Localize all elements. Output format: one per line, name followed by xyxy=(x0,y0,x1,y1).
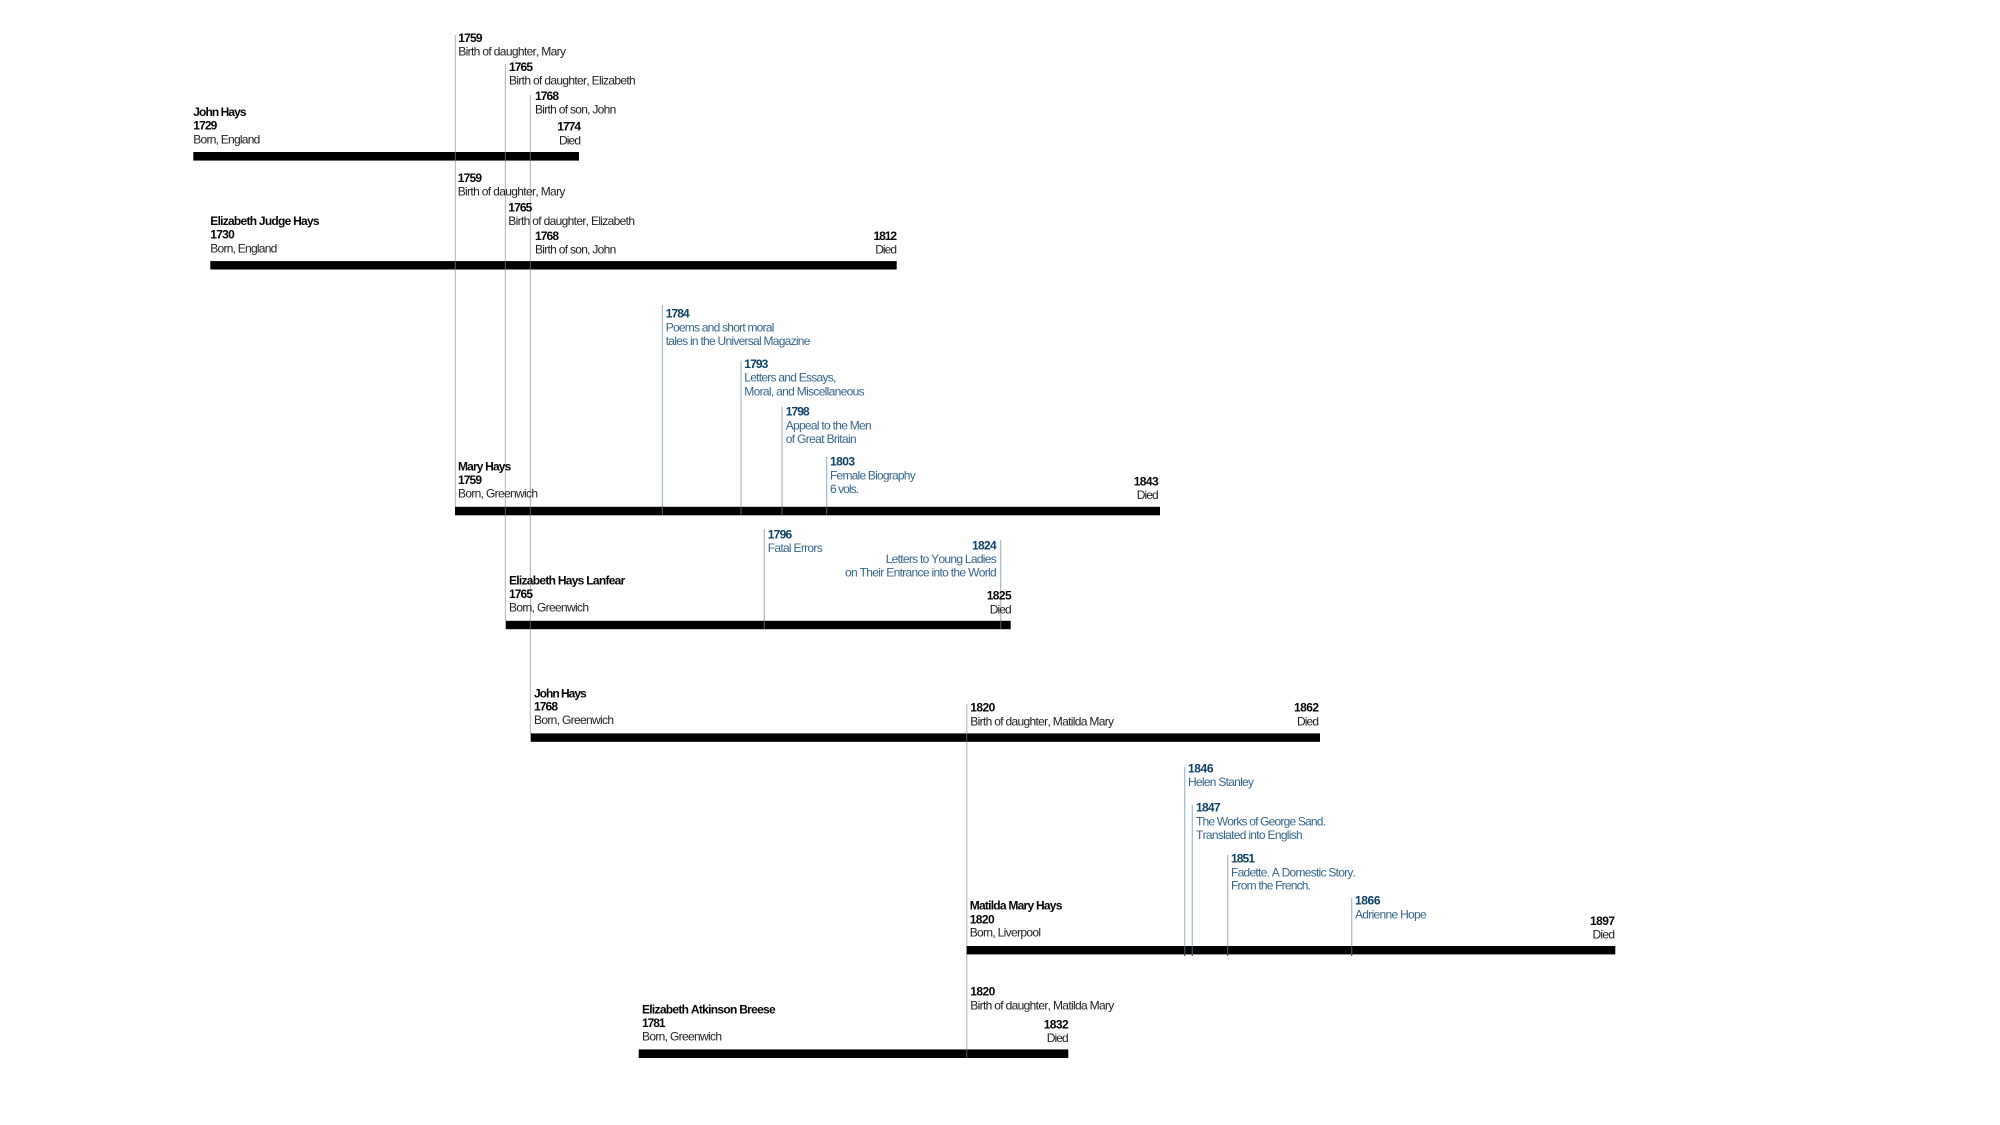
publication: 1796 Fatal Errors: 1796 xyxy=(768,527,793,541)
publication: 1851 Fadette xyxy=(1227,852,1356,947)
label: John Hays died 1774: 1774 xyxy=(557,120,581,134)
event: 1765 birth of daughter Elizabeth xyxy=(508,200,635,228)
publication: 1851 Fadette: Fadette. A Domestic Story. xyxy=(1231,865,1356,879)
label: Elizabeth Hays Lanfear died 1825 xyxy=(987,589,1012,616)
event: 1765 birth of daughter Elizabeth xyxy=(509,60,636,87)
publication: 1798 Appeal to the Men of Great Britain: 1798 xyxy=(786,405,810,419)
label: Elizabeth Judge Hays died 1812: Died xyxy=(875,243,897,257)
publication: 1846 Helen Stanley: 1846 xyxy=(1188,761,1214,775)
label: Elizabeth Hays Lanfear born xyxy=(509,573,626,615)
life bar: John Hays 1768 xyxy=(531,733,1320,742)
label: Elizabeth Atkinson Breese died 1832: Died xyxy=(1047,1031,1069,1045)
publication: 1847 The Works of George Sand: The Works of George Sand. xyxy=(1196,814,1326,828)
publication: 1851 Fadette: 1851 xyxy=(1231,852,1255,866)
label: John Hays born 1768: Born, Greenwich xyxy=(534,713,614,727)
event: 1765 birth of daughter Elizabeth: 1765 xyxy=(509,60,533,74)
label: Matilda Mary Hays born: Born, Liverpool xyxy=(970,926,1041,940)
publication: 1798 Appeal to the Men of Great Britain: Appeal to the Men xyxy=(786,418,872,432)
label: Matilda Mary Hays born: Matilda Mary Hays xyxy=(970,899,1063,913)
event: 1768 birth of son John: Birth of son, John xyxy=(535,103,616,117)
timeline: Elizabeth Atkinson Breese 1781-1832 xyxy=(639,985,1114,1058)
label: Elizabeth Atkinson Breese born: Elizabeth Atkinson Breese xyxy=(642,1002,776,1016)
timeline: John Hays 1729-1774 xyxy=(193,31,636,161)
label: Elizabeth Judge Hays died 1812 xyxy=(874,229,897,257)
label: Elizabeth Judge Hays born: Born, England xyxy=(210,241,277,255)
label: John Hays died 1774: Died xyxy=(559,133,581,147)
connector line: 1820 birth of Matilda Mary xyxy=(966,704,967,1058)
event: 1765 birth of daughter Elizabeth: 1765 xyxy=(508,200,533,214)
publication: 1846 Helen Stanley: Helen Stanley xyxy=(1188,775,1254,789)
publication: 1784 Poems and short moral tales xyxy=(662,305,811,507)
label: Matilda Mary Hays born xyxy=(970,899,1063,940)
event: 1820 birth of daughter Matilda Mary: 1820 xyxy=(970,985,996,999)
publication: 1824 Letters to Young Ladies: Letters to Young Ladies xyxy=(886,552,997,566)
label: Mary Hays died 1843: 1843 xyxy=(1134,474,1159,488)
life bar: Elizabeth Judge Hays xyxy=(210,261,897,270)
event: 1759 birth of daughter Mary: Birth of daughter, Mary xyxy=(458,45,566,59)
publication: 1824 Letters to Young Ladies: on Their Entrance into the World xyxy=(845,566,997,580)
label: Elizabeth Judge Hays born xyxy=(210,214,320,255)
publication: 1847 The Works of George Sand xyxy=(1192,801,1326,947)
label: John Hays born 1768 xyxy=(534,686,614,727)
publication: 1847 The Works of George Sand: Translated into English xyxy=(1196,828,1303,842)
publication: 1793 Letters and Essays: Moral, and Miscellaneous xyxy=(744,384,865,398)
label: Matilda Mary Hays died 1897: 1897 xyxy=(1590,914,1615,928)
publication: 1803 Female Biography: 6 vols. xyxy=(830,482,859,496)
event: 1759 birth of daughter Mary: Birth of daughter, Mary xyxy=(458,185,565,199)
event: 1759 birth of daughter Mary xyxy=(458,31,566,59)
event: 1820 birth of daughter Matilda Mary: 1820 xyxy=(970,701,996,715)
timeline: Mary Hays 1759-1843 xyxy=(455,305,1160,515)
publication: 1798 Appeal to the Men of Great Britain xyxy=(781,405,872,507)
label: Elizabeth Hays Lanfear born: Born, Greenwich xyxy=(509,601,589,615)
label: Elizabeth Atkinson Breese died 1832 xyxy=(1044,1017,1069,1045)
event: 1768 birth of son John: Birth of son, John xyxy=(535,243,616,257)
publication: 1824 Letters to Young Ladies: 1824 xyxy=(972,538,997,552)
label: John Hays born: 1729 xyxy=(193,119,218,133)
label: John Hays died 1862: 1862 xyxy=(1294,701,1319,715)
label: John Hays born 1768: 1768 xyxy=(534,699,558,713)
label: Elizabeth Judge Hays died 1812: 1812 xyxy=(874,229,897,243)
event: 1768 birth of son John: 1768 xyxy=(535,89,559,103)
label: Elizabeth Judge Hays born: 1730 xyxy=(210,228,235,242)
publication: 1803 Female Biography: 1803 xyxy=(830,455,855,469)
label: John Hays born xyxy=(193,105,260,146)
label: Matilda Mary Hays born: 1820 xyxy=(970,912,995,926)
label: John Hays born 1768: John Hays xyxy=(534,686,587,700)
publication: 1793 Letters and Essays xyxy=(740,357,865,507)
event: 1765 birth of daughter Elizabeth: Birth of daughter, Elizabeth xyxy=(508,214,635,228)
publication: 1796 Fatal Errors xyxy=(764,527,823,621)
publication: 1847 The Works of George Sand: 1847 xyxy=(1196,801,1221,815)
label: John Hays died 1774 xyxy=(557,120,581,147)
connector line: 1768 birth of John xyxy=(530,95,531,734)
timeline: Elizabeth Hays Lanfear 1765-1825 xyxy=(506,527,1012,629)
life bar: Elizabeth Hays Lanfear xyxy=(506,621,1011,629)
label: Elizabeth Atkinson Breese born xyxy=(642,1002,776,1043)
label: Elizabeth Atkinson Breese born: Born, Greenwich xyxy=(642,1029,722,1043)
timeline: John Hays 1768-1862 xyxy=(531,686,1320,742)
event: 1820 birth of daughter Matilda Mary xyxy=(970,985,1114,1012)
publication: 1793 Letters and Essays: 1793 xyxy=(744,357,769,371)
label: Matilda Mary Hays died 1897 xyxy=(1590,914,1615,942)
publication: 1803 Female Biography: Female Biography xyxy=(830,468,916,482)
label: Elizabeth Hays Lanfear died 1825: Died xyxy=(990,602,1012,616)
event: 1768 birth of son John: 1768 xyxy=(535,229,559,243)
label: Elizabeth Judge Hays born: Elizabeth Judge Hays xyxy=(210,214,320,228)
event: 1759 birth of daughter Mary: 1759 xyxy=(458,31,483,45)
label: Mary Hays born: 1759 xyxy=(458,473,482,487)
label: Mary Hays died 1843: Died xyxy=(1137,488,1159,502)
label: John Hays died 1862: Died xyxy=(1297,714,1319,728)
publication: 1796 Fatal Errors: Fatal Errors xyxy=(768,541,823,555)
life bar: Matilda Mary Hays xyxy=(967,946,1615,954)
label: Mary Hays born: Mary Hays xyxy=(458,459,512,473)
label: Mary Hays born xyxy=(458,459,538,500)
label: John Hays born: John Hays xyxy=(193,105,247,119)
label: Elizabeth Hays Lanfear born: Elizabeth Hays Lanfear xyxy=(509,573,626,587)
label: Elizabeth Hays Lanfear died 1825: 1825 xyxy=(987,589,1012,603)
publication: 1784 Poems and short moral tales: 1784 xyxy=(666,307,690,321)
label: Elizabeth Atkinson Breese died 1832: 1832 xyxy=(1044,1017,1069,1031)
event: 1759 birth of daughter Mary xyxy=(458,171,565,199)
publication: 1866 Adrienne Hope: 1866 xyxy=(1355,894,1381,908)
connector line: 1765 birth of Elizabeth xyxy=(505,64,506,621)
publication: 1793 Letters and Essays: Letters and Essays, xyxy=(744,371,836,385)
publication: 1803 Female Biography xyxy=(826,455,916,507)
publication: 1824 Letters to Young Ladies xyxy=(845,538,1001,621)
publication: 1784 Poems and short moral tales: Poems and short moral xyxy=(666,320,774,334)
publication: 1846 Helen Stanley xyxy=(1184,761,1254,947)
event: 1820 birth of daughter Matilda Mary xyxy=(970,701,1114,728)
label: Elizabeth Hays Lanfear born: 1765 xyxy=(509,587,533,601)
label: John Hays died 1862 xyxy=(1294,701,1319,728)
publication: 1866 Adrienne Hope xyxy=(1351,894,1427,947)
publication: 1866 Adrienne Hope: Adrienne Hope xyxy=(1355,907,1427,921)
publication: 1851 Fadette: From the French. xyxy=(1231,879,1311,893)
label: Mary Hays died 1843 xyxy=(1134,474,1159,502)
event: 1768 birth of son John xyxy=(535,229,616,257)
timeline: Elizabeth Judge Hays 1730-1812 xyxy=(210,171,897,270)
label: Matilda Mary Hays died 1897: Died xyxy=(1592,928,1615,942)
publication: 1784 Poems and short moral tales: tales in the Universal Magazine xyxy=(666,334,811,348)
event: 1820 birth of daughter Matilda Mary: Birth of daughter, Matilda Mary xyxy=(970,998,1114,1012)
publication: 1798 Appeal to the Men of Great Britain: of Great Britain xyxy=(786,432,857,446)
timeline: Matilda Mary Hays 1820-1897 xyxy=(967,761,1615,954)
life bar: Mary Hays xyxy=(455,507,1160,515)
event: 1759 birth of daughter Mary: 1759 xyxy=(458,171,482,185)
label: John Hays born: Born, England xyxy=(193,132,260,146)
label: Mary Hays born: Born, Greenwich xyxy=(458,486,538,500)
event: 1820 birth of daughter Matilda Mary: Birth of daughter, Matilda Mary xyxy=(970,714,1114,728)
connector line: 1759 birth of Mary xyxy=(455,35,456,507)
event: 1765 birth of daughter Elizabeth: Birth of daughter, Elizabeth xyxy=(509,73,636,87)
life bar: John Hays xyxy=(193,152,579,161)
life bar: Elizabeth Atkinson Breese xyxy=(639,1049,1068,1058)
label: Elizabeth Atkinson Breese born: 1781 xyxy=(642,1016,666,1030)
event: 1768 birth of son John xyxy=(535,89,616,117)
